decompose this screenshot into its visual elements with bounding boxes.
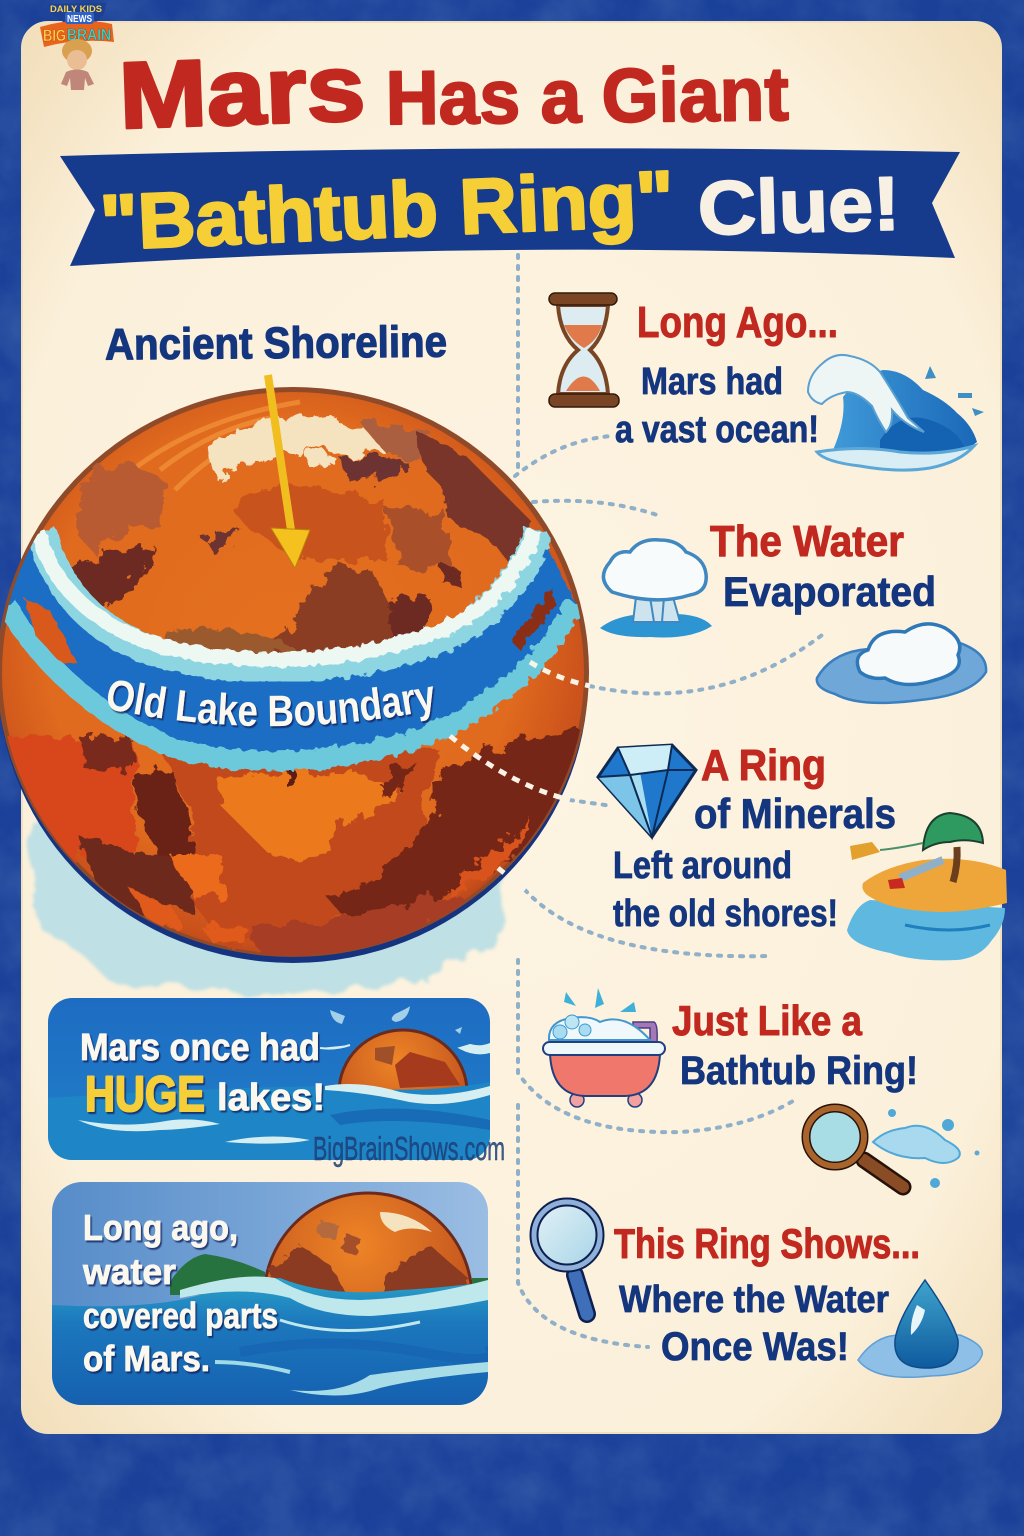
- icon: evaporating cloud: [600, 540, 712, 638]
- top streaks: [120, 402, 300, 490]
- banner headline: Clue!: [697, 161, 901, 252]
- medium Mars: [265, 1192, 472, 1292]
- below the band: [0, 730, 134, 860]
- icon: water drop with puddle: [858, 1280, 982, 1377]
- text: This Ring Shows: This Ring Shows...: [614, 1220, 920, 1267]
- white dashed connectors from band: [450, 662, 590, 890]
- panel text: Long ago,: [83, 1207, 238, 1248]
- panel: Mars once had huge lakes: [48, 998, 490, 1160]
- text: A Ring of Minerals: of Minerals: [694, 790, 896, 837]
- banner headline: "Bathtub Ring": [98, 154, 676, 267]
- text: The Water Evaporated: The Water: [710, 517, 904, 566]
- yellow arrow to shoreline: [268, 375, 310, 568]
- panel: Long ago water covered parts of Mars: [52, 1182, 492, 1405]
- text: Where the Water Once Was: Once Was!: [661, 1325, 849, 1369]
- panel text: [82, 1207, 278, 1379]
- panel text: [80, 1027, 325, 1122]
- ribbon banner: [60, 148, 960, 267]
- icon: cloud and puddle: [817, 624, 986, 703]
- connector dotted lines: [515, 255, 826, 1347]
- old lake water band: [6, 528, 574, 761]
- text: Mars had a vast ocean: a vast ocean!: [615, 409, 819, 451]
- icon: large magnifying glass: [534, 1202, 600, 1314]
- title: Mars Has a Giant: Has a Giant: [385, 52, 789, 141]
- title: Mars Has a Giant: Mars: [117, 35, 367, 148]
- logo: Daily Kids News Big Brain: [40, 3, 114, 90]
- text: Long Ago: Long Ago...: [637, 298, 838, 347]
- panel text: of Mars.: [83, 1338, 210, 1379]
- text: Left around the old shores: [613, 845, 838, 935]
- text: Left around the old shores: Left around: [613, 845, 792, 887]
- text: Just Like a Bathtub Ring: Just Like a: [672, 997, 863, 1044]
- text: A Ring of Minerals: [694, 741, 896, 837]
- text: Where the Water Once Was: [619, 1279, 889, 1369]
- splashes: [330, 1006, 462, 1034]
- title: Mars Has a Giant: [117, 35, 789, 148]
- panel text: HUGE: [85, 1066, 205, 1122]
- text: The Water Evaporated: [710, 517, 936, 615]
- text: The Water Evaporated: Evaporated: [723, 568, 936, 615]
- icon: bathtub: [543, 988, 665, 1107]
- text: Mars had a vast ocean: Mars had: [641, 361, 783, 403]
- icon: island with umbrella: [847, 813, 1007, 960]
- text: Mars had a vast ocean: [615, 361, 819, 451]
- logo: Daily Kids News Big Brain: BRAIN: [67, 27, 111, 44]
- icon: blue diamond: [598, 745, 696, 837]
- logo: Daily Kids News Big Brain: DAILY KIDS: [50, 4, 102, 14]
- mars showing through band ends: [24, 598, 78, 664]
- icon: hourglass: [549, 293, 619, 407]
- panel text: lakes!: [217, 1077, 325, 1119]
- panel text: water: [82, 1251, 176, 1292]
- small Mars at horizon: [338, 1028, 468, 1090]
- label: Old Lake Boundary: Old Lake Boundary: [108, 680, 435, 729]
- pale watercolor shadow under planet: [30, 800, 502, 991]
- panel text: covered parts: [83, 1295, 278, 1336]
- icon: ocean wave: [808, 355, 984, 470]
- logo: Daily Kids News Big Brain: NEWS: [67, 14, 92, 25]
- icon: magnifier and mineral foam: [806, 1108, 980, 1188]
- logo: Daily Kids News Big Brain: BIG: [43, 26, 66, 45]
- text: A Ring of Minerals: A Ring: [701, 741, 826, 790]
- text: Where the Water Once Was: Where the Water: [619, 1279, 889, 1321]
- watermark: BigBrainShows.com: BigBrainShows.com: [313, 1130, 505, 1167]
- Mars planet: [0, 387, 590, 965]
- panel text: Mars once had: [80, 1027, 320, 1069]
- text: Just Like a Bathtub Ring: [672, 997, 918, 1093]
- label: Ancient Shoreline: Ancient Shoreline: [105, 318, 447, 369]
- text: Left around the old shores: the old shores!: [613, 893, 838, 935]
- text: Just Like a Bathtub Ring: Bathtub Ring!: [680, 1049, 918, 1093]
- surface patches: [0, 416, 590, 965]
